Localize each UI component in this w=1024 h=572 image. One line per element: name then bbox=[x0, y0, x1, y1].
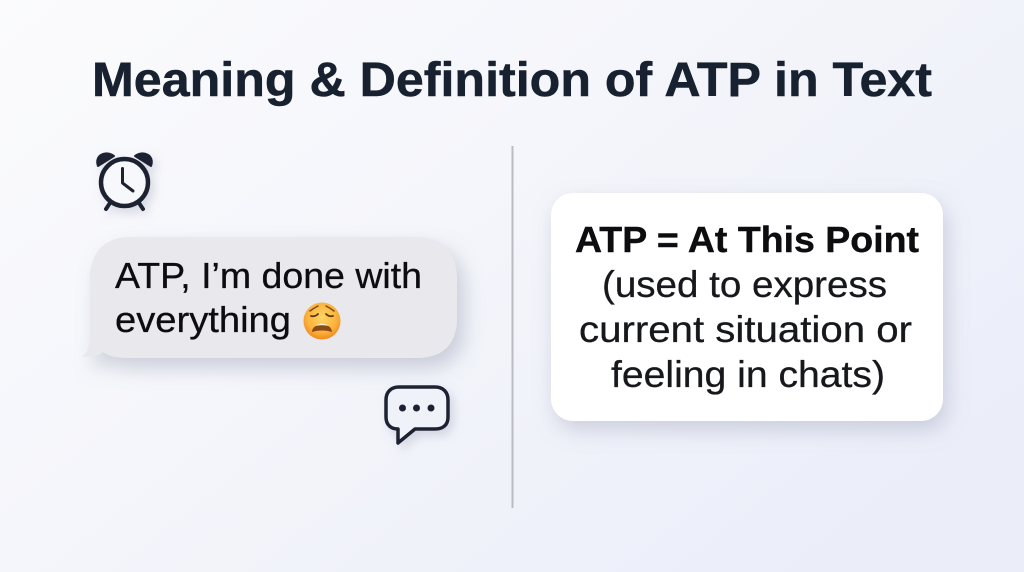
icon: alarm clock bbox=[97, 153, 152, 209]
definition card bbox=[551, 193, 943, 421]
bubble shape bbox=[82, 237, 457, 358]
card heading: ATP = At This Point bbox=[575, 219, 919, 260]
card description: current situation or bbox=[579, 309, 912, 350]
card description: (used to express bbox=[602, 264, 887, 305]
card background bbox=[551, 193, 943, 421]
title: Meaning & Definition of ATP in Text bbox=[92, 54, 932, 107]
icon: chat bubble with dots bbox=[386, 387, 448, 443]
message bubble bbox=[82, 237, 457, 358]
center divider bbox=[512, 146, 514, 508]
icon: weary face emoji bbox=[304, 302, 340, 340]
bubble text: ATP, I’m done with bbox=[115, 255, 422, 296]
bubble text: everything bbox=[115, 299, 291, 340]
card description: feeling in chats) bbox=[611, 354, 885, 395]
